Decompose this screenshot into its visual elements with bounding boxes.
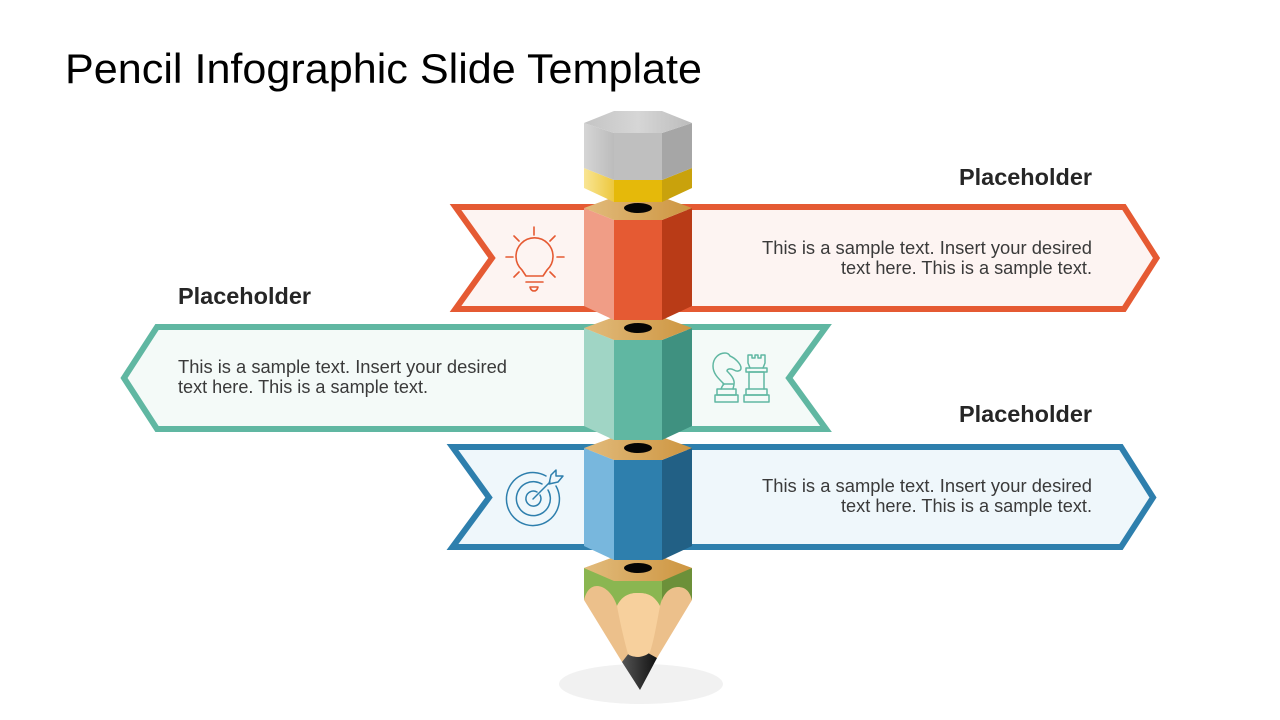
segment: blue (584, 437, 692, 560)
panel: orange banner (456, 164, 1156, 309)
segment: green (584, 317, 692, 440)
pencil tip (584, 557, 692, 690)
icon: chess pieces (713, 353, 769, 402)
eraser (584, 111, 692, 180)
icon: target with arrow (506, 470, 563, 526)
text block: orange banner: text here. This is a sample text. (841, 257, 1092, 278)
shadow (559, 664, 723, 704)
panel: blue banner (452, 401, 1153, 547)
text block: green banner: text here. This is a sample text. (178, 376, 428, 397)
heading: blue banner: Placeholder (959, 401, 1092, 427)
icon: light bulb (506, 227, 564, 291)
heading: green banner: Placeholder (178, 283, 311, 309)
eraser band (584, 168, 692, 202)
text block: blue banner: This is a sample text. Insert your desired (762, 475, 1092, 496)
text block: orange banner: This is a sample text. Insert your desired (762, 237, 1092, 258)
segment: orange (584, 197, 692, 320)
text block: blue banner (762, 475, 1092, 516)
text block: orange banner (762, 237, 1092, 278)
heading: orange banner: Placeholder (959, 164, 1092, 190)
text block: green banner: This is a sample text. Insert your desired (178, 356, 507, 377)
icon: pencil (559, 111, 723, 704)
text block: blue banner: text here. This is a sample text. (841, 495, 1092, 516)
text block: green banner (178, 356, 507, 397)
title: Pencil Infographic Slide Template (65, 45, 702, 92)
panel: green banner (124, 283, 826, 429)
